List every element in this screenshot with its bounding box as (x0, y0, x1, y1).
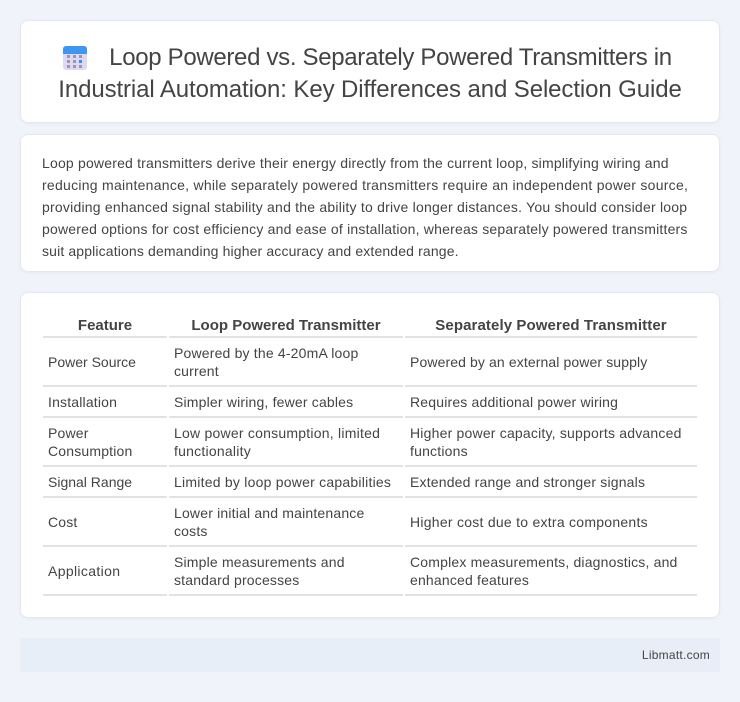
header: Loop Powered Transmitter: Loop Powered Transmitter (191, 317, 381, 334)
row: Power Source: Power Source (48, 354, 136, 370)
comparison table: Powered by the 4-20mA loop (174, 345, 358, 361)
comparison table: Lower initial and maintenance (174, 505, 364, 521)
comparison table: current (174, 363, 219, 379)
comparison table: Simple measurements and (174, 554, 345, 570)
intro text: reducing maintenance, while separately powered transmitters require an independent power source, (42, 177, 688, 193)
intro text: suit applications demanding higher accuracy and extended range. (42, 243, 459, 259)
intro text: powered options for cost efficiency and ease of installation, whereas separately powered transmitters (42, 221, 688, 237)
comparison table (43, 317, 697, 596)
footer bar (20, 638, 720, 672)
row: Power Consumption: Consumption (48, 443, 132, 459)
intro text (42, 155, 688, 259)
intro text: providing enhanced signal stability and the ability to drive longer distances. You should consider loop (42, 199, 687, 215)
title: Loop Powered vs. Separately Powered Transmitters in (109, 44, 672, 71)
row: Application: Application (48, 563, 120, 579)
comparison table: Powered by an external power supply (410, 354, 647, 370)
row: Power Consumption (48, 425, 132, 459)
row: Signal Range: Signal Range (48, 474, 132, 490)
icon: calendar grid (63, 46, 87, 70)
comparison table: costs (174, 523, 208, 539)
comparison table: functions (410, 443, 468, 459)
row: Cost: Cost (48, 514, 78, 530)
comparison table: Low power consumption, limited (174, 425, 380, 441)
comparison table: Limited by loop power capabilities (174, 474, 391, 490)
intro text: Loop powered transmitters derive their energy directly from the current loop, simplifying wiring and (42, 155, 669, 171)
header: Feature: Feature (78, 317, 132, 334)
comparison table: Higher cost due to extra components (410, 514, 648, 530)
comparison table: Requires additional power wiring (410, 394, 618, 410)
comparison table: functionality (174, 443, 251, 459)
panel: comparison table (20, 292, 720, 618)
comparison table: Complex measurements, diagnostics, and (410, 554, 678, 570)
footer text: Libmatt.com (642, 648, 710, 662)
header panel (20, 20, 720, 123)
comparison table: standard processes (174, 572, 299, 588)
title: Industrial Automation: Key Differences and Selection Guide (58, 76, 682, 103)
comparison table: Extended range and stronger signals (410, 474, 645, 490)
header: Separately Powered Transmitter: Separately Powered Transmitter (435, 317, 667, 334)
row: Power Consumption: Power (48, 425, 89, 441)
comparison table: enhanced features (410, 572, 529, 588)
panel: intro (20, 134, 720, 272)
title (58, 44, 682, 103)
comparison table: Higher power capacity, supports advanced (410, 425, 682, 441)
row: Installation: Installation (48, 394, 117, 410)
comparison table: Simpler wiring, fewer cables (174, 394, 353, 410)
